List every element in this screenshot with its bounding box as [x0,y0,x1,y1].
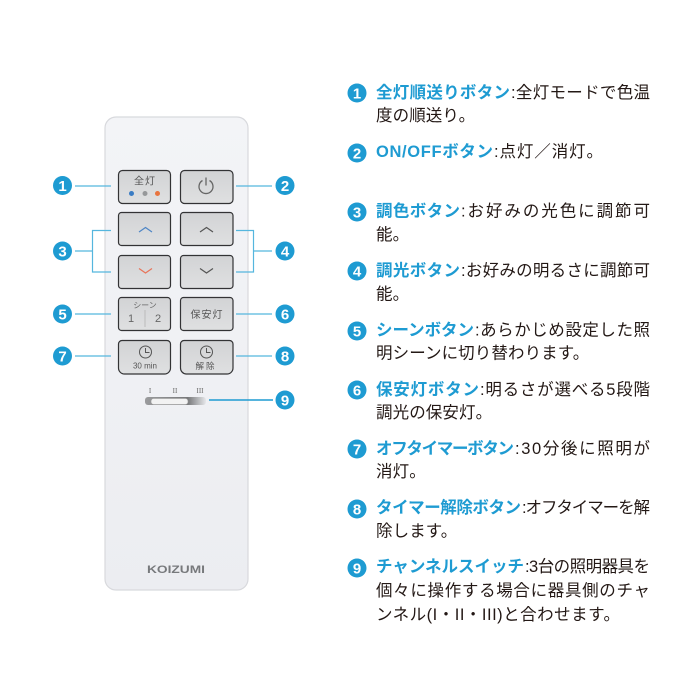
description 8: 8 [353,502,361,518]
description 7: 消灯。 [376,462,426,481]
marker 9: 9 [281,392,289,410]
marker 3 [53,242,72,260]
description 1 [348,82,650,125]
description 1: 全灯順送りボタン [376,82,510,102]
button: color up [118,212,170,246]
leader lines [75,186,273,400]
marker 3: 3 [58,244,67,260]
marker 1 [53,176,72,195]
description 1: 度の順送り。 [376,106,475,125]
button: scene [118,298,170,330]
marker 6 [276,304,294,324]
description 7: オフタイマーボタン [376,439,514,458]
description 3: 能。 [376,225,409,244]
description 6 [348,380,650,422]
description 4: :お好みの明るさに調節可 [461,261,650,280]
description 2: :点灯／消灯。 [494,142,603,161]
description 2: ON/OFFボタン [376,142,493,161]
button: brightness down [180,256,233,288]
button: security light: 保安灯 [190,308,224,321]
description 8: タイマー解除ボタン [376,498,521,517]
button: off timer: 30 min [133,362,157,370]
button: full light [118,170,170,204]
button: timer cancel [180,340,233,374]
description 1: 1 [353,86,361,102]
description 8: :オフタイマーを解 [522,498,650,517]
description 5 [348,320,650,362]
button: scene: 1 [128,313,134,325]
brand logo: KOIZUMI [147,564,205,576]
description 9 [348,557,650,624]
description 4 [348,261,650,304]
marker 5: 5 [58,306,67,324]
marker 9 [276,390,294,410]
description 8: 除します。 [376,522,457,540]
description 7: 7 [353,442,361,458]
marker 8: 8 [281,348,289,366]
description 4: 能。 [376,284,409,304]
button: scene: 2 [155,313,161,325]
button: scene: シーン [133,301,157,310]
description 3: :お好みの光色に調節可 [461,202,650,220]
description 4: 4 [353,264,362,280]
button: power [180,170,233,204]
button: timer cancel: 解除 [195,361,217,371]
description 6: :明るさが選べる5段階 [480,380,650,399]
description 4: 調光ボタン [376,261,460,280]
description 3: 3 [353,204,361,222]
channel switch: III [196,387,204,395]
description 9: ンネル(I・II・III)と合わせます。 [376,605,620,624]
description 9: 個々に操作する場合に器具側のチャ [376,581,650,600]
description 5: 5 [353,324,361,340]
channel switch: II [173,387,178,395]
description 6: 調光の保安灯。 [376,403,492,422]
description 7 [348,439,650,481]
description 9: チャンネルスイッチ [376,557,524,576]
description 7: :30分後に照明が [515,439,650,458]
marker 7: 7 [58,348,67,366]
marker 6: 6 [281,306,289,324]
button: off timer [118,340,170,374]
description 2 [348,142,603,162]
description 6: 保安灯ボタン [376,380,479,399]
description 9: :3台の照明器具を [525,557,650,576]
description 5: 明シーンに切り替わります。 [376,344,589,362]
marker 4 [276,242,294,260]
marker 2: 2 [281,178,289,195]
marker 4: 4 [281,244,290,260]
description 5: シーンボタン [376,320,474,340]
channel switch: I [149,387,152,395]
button: security light [180,298,233,330]
channel switch [145,387,206,405]
description 3: 調色ボタン [376,200,460,220]
remote control [105,117,248,590]
description 6: 6 [353,382,361,400]
description 8 [348,498,650,540]
description 2: 2 [353,146,361,162]
marker 5 [53,304,72,324]
description 9: 9 [353,560,361,578]
description 1: :全灯モードで色温 [511,83,650,102]
description 3 [348,200,650,244]
marker 1: 1 [58,178,67,195]
description 5: :あらかじめ設定した照 [475,320,650,340]
remote body [105,117,248,590]
button: full light: 全灯 [134,174,156,188]
button: color down [118,256,170,288]
marker 7 [53,346,72,366]
button: brightness up [180,212,233,246]
marker 8 [276,346,294,366]
marker 2 [276,176,294,195]
